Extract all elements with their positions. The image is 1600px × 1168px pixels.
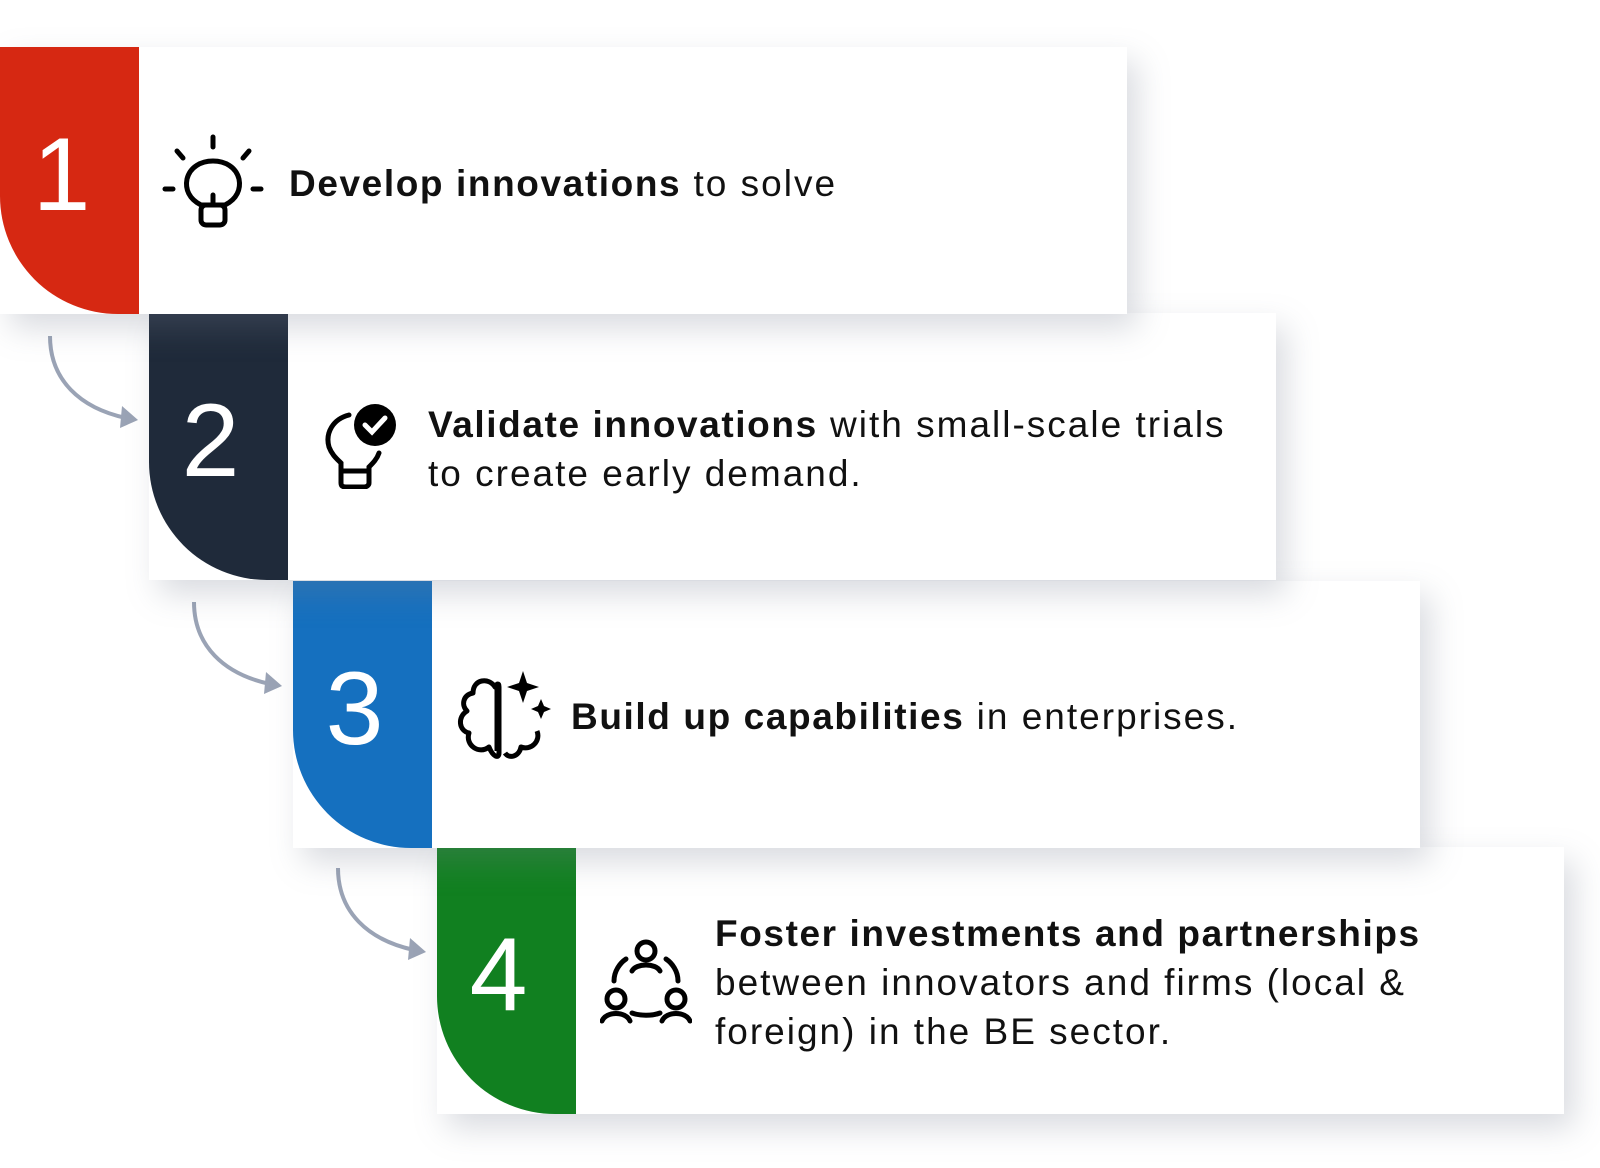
text 4: Foster investments and partnerships <box>715 913 1421 954</box>
number block 2 <box>149 313 288 580</box>
arrow 1 <box>48 336 138 428</box>
text 3: Build up capabilities in enterprises. <box>571 696 1239 737</box>
number block 3: 3 <box>326 651 383 767</box>
card 4 <box>437 847 1564 1114</box>
number block 1: 1 <box>33 117 90 233</box>
card 3 <box>293 581 1420 848</box>
number block 1 <box>0 47 139 314</box>
icon: people network <box>600 940 692 1024</box>
card 2 <box>149 313 1276 580</box>
number block 2: 2 <box>182 383 239 499</box>
text 1: Develop innovations to solve <box>289 163 837 204</box>
text 2 <box>428 404 1226 494</box>
number block 4 <box>437 847 576 1114</box>
icon: brain with sparkles <box>458 671 551 759</box>
text 4: between innovators and firms (local & <box>715 962 1406 1003</box>
number block 4: 4 <box>470 917 527 1033</box>
text 4: foreign) in the BE sector. <box>715 1011 1172 1052</box>
text 4 <box>715 913 1421 1052</box>
arrow 2 <box>192 602 282 694</box>
card 1 <box>0 47 1127 314</box>
text 2: Validate innovations with small-scale trials <box>428 404 1226 445</box>
number block 3 <box>293 581 432 848</box>
arrow 3 <box>336 868 426 960</box>
text 2: to create early demand. <box>428 453 863 494</box>
icon: validated bulb <box>325 404 396 489</box>
icon: lightbulb <box>162 134 264 228</box>
